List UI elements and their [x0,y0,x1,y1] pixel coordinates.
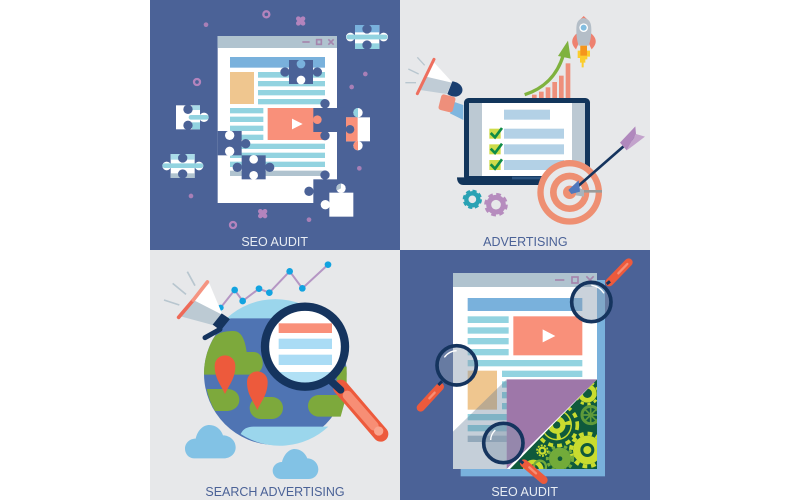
caption: ADVERTISING [483,235,568,249]
caption: SEARCH ADVERTISING [205,485,345,499]
line chart [218,261,331,311]
puzzle piece: top right striped [346,24,388,50]
icon: magnifier [263,307,383,436]
panel: search advertising [150,250,400,500]
puzzle piece: left striped [176,105,209,130]
panel: advertising [400,0,650,250]
arrow: growth [525,41,571,95]
bar chart [532,63,570,99]
icon: clouds [185,425,318,479]
puzzle piece: lower right white [321,184,353,217]
page fold shadow [453,379,507,469]
icon: teal gear [464,191,481,208]
caption: SEO AUDIT [491,485,558,499]
icon: check marks [489,128,502,170]
puzzle piece: bottom left striped [162,153,203,179]
icon: magnifier top right [572,262,629,322]
icon: magnifier left [421,346,476,408]
panel: SEO audit puzzle [150,0,400,250]
browser window [453,273,605,476]
icon: purple gear [486,194,506,215]
icon: arrow in target [568,126,645,194]
icon: hand and megaphone [405,57,463,120]
caption: SEO AUDIT [241,235,308,249]
laptop [457,98,597,185]
puzzle piece: right orange [346,108,370,150]
icon: map pins [215,355,268,410]
browser window [218,36,337,203]
icon: rocket [572,16,596,67]
panel: SEO audit page [400,250,650,500]
globe [204,299,347,446]
purple fold [507,379,597,469]
icon: megaphone [164,272,230,338]
decorative dots and crosses [189,11,368,228]
gears corner [510,380,597,469]
puzzle cut-outs [218,60,346,203]
icon: magnifier bottom [484,423,544,480]
icon: target [537,160,602,225]
